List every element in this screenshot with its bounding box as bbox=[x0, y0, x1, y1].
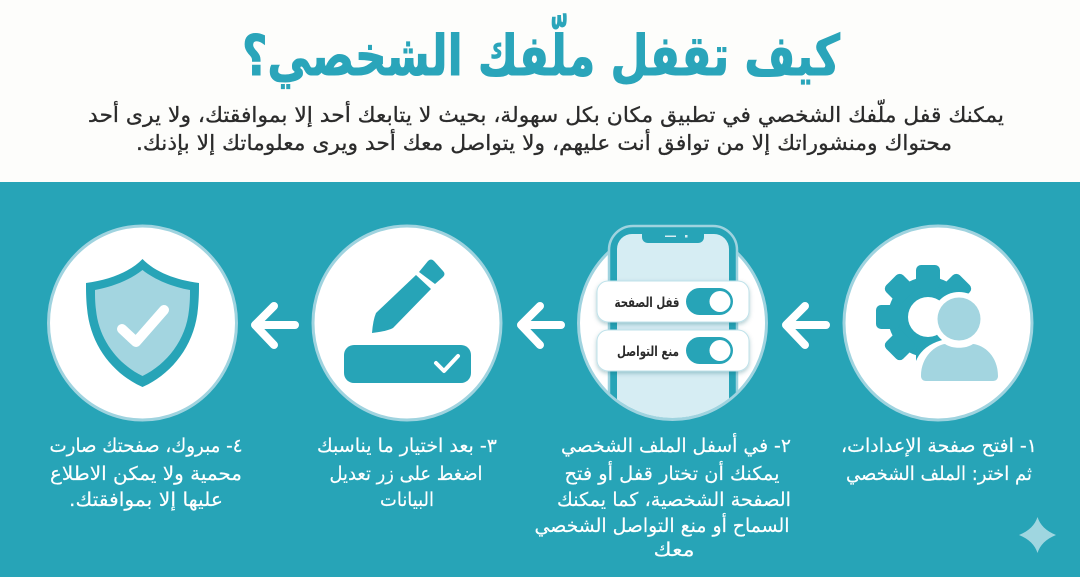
icon: user bbox=[914, 292, 1005, 384]
step 3 text: ٣- بعد اختيار ما يناسبك bbox=[317, 435, 497, 457]
arrow 1 bbox=[786, 306, 826, 345]
step 3 icon: pencil and bar bbox=[313, 226, 501, 420]
icon: phone bbox=[608, 224, 738, 418]
step 2 icon: phone with toggles bbox=[577, 224, 768, 421]
step 3 text bbox=[317, 435, 497, 511]
card: lock page toggle bbox=[597, 281, 749, 322]
title: كيف تقفل ملّفك الشخصي؟ bbox=[242, 14, 840, 89]
card: block contact toggle bbox=[597, 330, 749, 371]
icon: pencil bbox=[372, 260, 444, 333]
card: lock page toggle: قفل الصفحة bbox=[614, 295, 680, 311]
intro text: محتواك ومنشوراتك إلا من توافق أنت عليهم، ولا يتواصل معك أحد ويرى معلوماتك إلا بإذنك. bbox=[136, 129, 952, 156]
step 3 text: البيانات bbox=[380, 489, 434, 511]
icon: gear bbox=[876, 265, 980, 369]
step 2 text: السماح أو منع التواصل الشخصي bbox=[534, 513, 790, 537]
step 1 text: ١- افتح صفحة الإعدادات، bbox=[841, 435, 1037, 457]
intro text bbox=[88, 98, 1004, 156]
step 4 text: محمية ولا يمكن الاطلاع bbox=[50, 463, 242, 485]
step 1 text bbox=[841, 435, 1037, 485]
header panel bbox=[0, 0, 1080, 182]
step 2 text: ٢- في أسفل الملف الشخصي bbox=[561, 433, 791, 457]
step 4 text: ٤- مبروك، صفحتك صارت bbox=[50, 435, 242, 457]
step 2 text: الصفحة الشخصية، كما يمكنك bbox=[557, 489, 791, 511]
arrow 3 bbox=[255, 306, 295, 345]
step 2 text: يمكنك أن تختار قفل أو فتح bbox=[564, 461, 780, 485]
card: block contact toggle: منع التواصل bbox=[617, 344, 679, 360]
step 4 icon: shield bbox=[48, 226, 236, 420]
step 4 text: عليها إلا بموافقتك. bbox=[69, 489, 223, 512]
arrow 2 bbox=[521, 306, 561, 345]
step 3 text: اضغط على زر تعديل bbox=[330, 463, 482, 485]
step 4 text bbox=[50, 435, 242, 512]
icon: shield bbox=[86, 259, 199, 387]
teal steps panel bbox=[0, 182, 1080, 577]
step 1 icon: gear and user bbox=[844, 226, 1032, 420]
intro text: يمكنك قفل ملّفك الشخصي في تطبيق مكان بكل سهولة، بحيث لا يتابعك أحد إلا بموافقتك، ولا يرى أحد bbox=[88, 98, 1004, 128]
icon: check bar bbox=[344, 345, 471, 383]
icon: sparkle bbox=[1019, 517, 1056, 553]
step 2 text bbox=[534, 433, 791, 561]
step 1 text: ثم اختر: الملف الشخصي bbox=[846, 463, 1032, 485]
step 2 text: معك bbox=[654, 539, 694, 561]
